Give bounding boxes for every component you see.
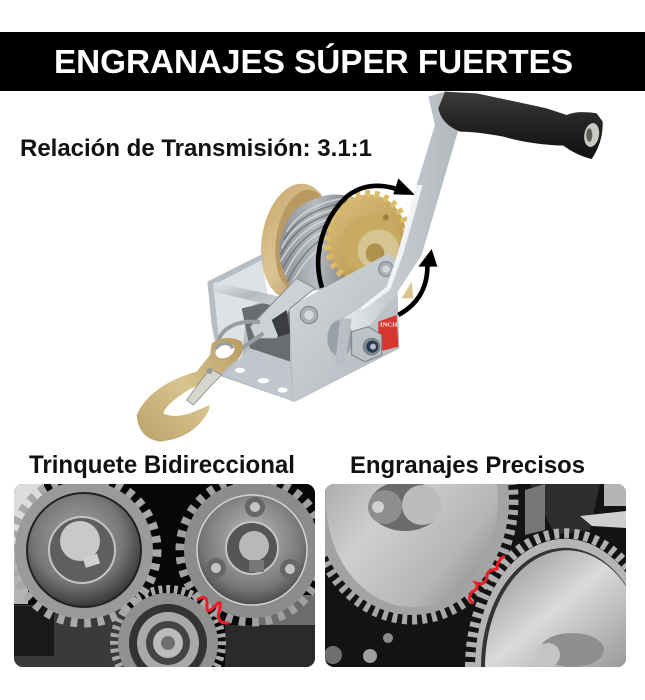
red label: INCH [380,322,398,329]
red label [378,315,398,352]
title banner: ENGRANAJES SÚPER FUERTES [54,43,573,81]
gear left [11,477,157,623]
bolts [300,262,393,324]
rotation arrow: lower [398,249,437,315]
heading: precise gears: Engranajes Precisos [350,452,585,479]
winch product illustration [137,92,603,442]
panel: precise gears photo [325,484,626,667]
brass ratchet gear [320,187,414,289]
cable loop [218,322,263,354]
red mesh line [197,598,229,623]
frame front plate [289,253,399,402]
heading: transmission ratio: Relación de Transmisión: 3.1:1 [20,135,372,162]
black handle grip [438,92,603,159]
title banner [0,32,645,91]
red mesh line [469,556,505,603]
rotation arrow: upper [318,178,415,288]
ratchet pawl [250,278,315,338]
bolts lower-left [324,633,393,664]
rear drum flange [254,179,339,304]
crank handle arm [338,92,458,338]
gear right [180,478,324,622]
pivot nut [327,318,382,367]
large gear lower-right [470,533,640,667]
steel cable drum [280,195,360,292]
panel: ratchet gears photo [14,484,315,667]
heading: bidirectional ratchet: Trinquete Bidireccional [29,452,295,479]
snap hook [137,338,243,442]
frame rear bracket [207,254,294,402]
large gear upper-left [325,484,518,624]
gear bottom [110,585,226,667]
